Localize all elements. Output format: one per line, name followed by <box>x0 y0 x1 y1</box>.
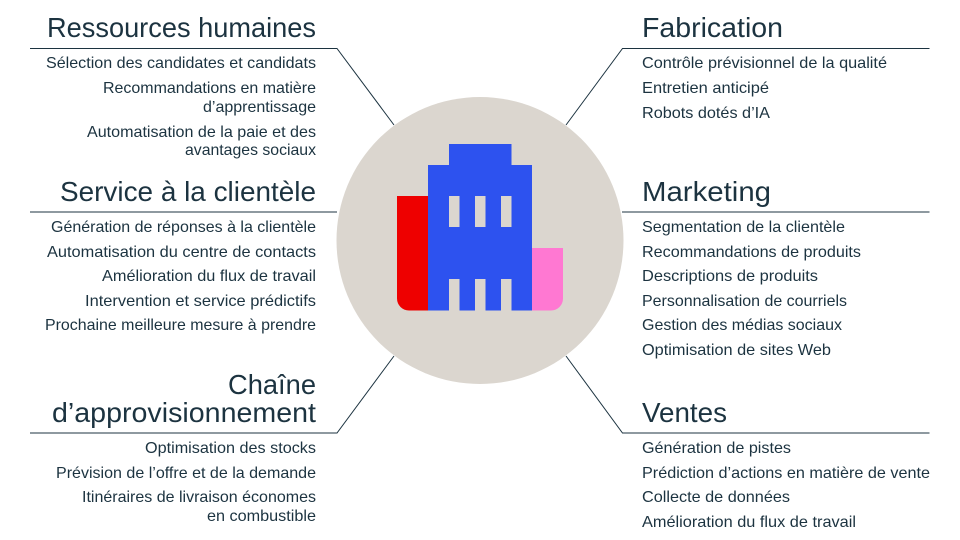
list: Service à la clientèle <box>45 219 316 334</box>
connector: Service à la clientèle <box>30 211 337 213</box>
list: Service à la clientèle: Automatisation du centre de contacts <box>47 244 316 261</box>
list: Chaîne d'approvisionnement <box>56 440 316 525</box>
heading: Fabrication: Fabrication <box>642 12 783 43</box>
list: Ventes: Génération de pistes <box>642 440 791 457</box>
heading: Marketing: Marketing <box>642 176 771 207</box>
list: Ventes <box>642 440 930 531</box>
list: Fabrication: Contrôle prévisionnel de la qualité <box>642 55 887 72</box>
list: Ressources humaines: avantages sociaux <box>185 142 316 159</box>
connector: Ventes <box>566 356 930 433</box>
list: Ressources humaines: Recommandations en matière <box>103 80 316 97</box>
list: Chaîne d'approvisionnement: en combustible <box>207 508 316 525</box>
list: Fabrication: Entretien anticipé <box>642 80 769 97</box>
panel: Ventes <box>566 356 930 531</box>
heading: Service à la clientèle: Service à la clientèle <box>60 176 316 207</box>
list: Fabrication <box>642 55 887 122</box>
list: Ventes: Amélioration du flux de travail <box>642 514 856 531</box>
list: Ressources humaines: d’apprentissage <box>203 99 316 116</box>
list: Marketing: Gestion des médias sociaux <box>642 317 842 334</box>
list: Service à la clientèle: Intervention et service prédictifs <box>85 293 316 310</box>
panel: Ressources humaines <box>30 12 394 159</box>
heading: Chaîne d'approvisionnement <box>52 369 316 428</box>
panel: Service à la clientèle <box>30 176 337 334</box>
icon: building <box>397 144 563 310</box>
list: Ressources humaines <box>46 55 316 159</box>
connector: Fabrication <box>566 48 930 125</box>
list: Service à la clientèle: Amélioration du flux de travail <box>102 268 316 285</box>
connector: Chaîne d'approvisionnement <box>30 356 394 433</box>
heading: Ventes: Ventes <box>642 397 727 428</box>
list: Ventes: Collecte de données <box>642 489 790 506</box>
list: Marketing: Segmentation de la clientèle <box>642 219 845 236</box>
connector: Ressources humaines <box>30 48 394 125</box>
list: Chaîne d'approvisionnement: Prévision de l’offre et de la demande <box>56 465 316 482</box>
list: Ventes: Prédiction d’actions en matière de vente <box>642 465 930 482</box>
heading: Chaîne d'approvisionnement: Chaîne <box>228 369 316 400</box>
connector: Marketing <box>622 211 930 213</box>
list: Marketing: Recommandations de produits <box>642 244 861 261</box>
list: Service à la clientèle: Génération de réponses à la clientèle <box>51 219 316 236</box>
list: Marketing: Optimisation de sites Web <box>642 342 831 359</box>
list: Chaîne d'approvisionnement: Optimisation des stocks <box>145 440 316 457</box>
heading: Chaîne d'approvisionnement: d’approvisionnement <box>52 397 316 428</box>
list: Chaîne d'approvisionnement: Itinéraires de livraison économes <box>82 489 316 506</box>
list: Ressources humaines: Automatisation de la paie et des <box>87 124 316 141</box>
list: Service à la clientèle: Prochaine meilleure mesure à prendre <box>45 317 316 334</box>
heading: Ressources humaines: Ressources humaines <box>47 12 316 43</box>
list: Fabrication: Robots dotés d’IA <box>642 105 770 122</box>
panel: Chaîne d'approvisionnement <box>30 356 394 525</box>
list: Marketing: Personnalisation de courriels <box>642 293 847 310</box>
central circle <box>336 97 624 384</box>
list: Marketing <box>642 219 861 359</box>
list: Marketing: Descriptions de produits <box>642 268 818 285</box>
list: Ressources humaines: Sélection des candidates et candidats <box>46 55 316 72</box>
panel: Fabrication <box>566 12 930 125</box>
panel: Marketing <box>622 176 930 359</box>
